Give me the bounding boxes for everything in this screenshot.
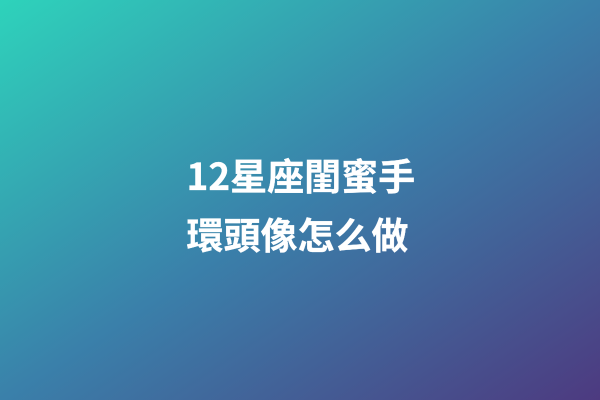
title: [186, 147, 415, 260]
title: 環頭像怎么做: [186, 206, 408, 260]
title: 12星座閨蜜手: [186, 147, 415, 201]
